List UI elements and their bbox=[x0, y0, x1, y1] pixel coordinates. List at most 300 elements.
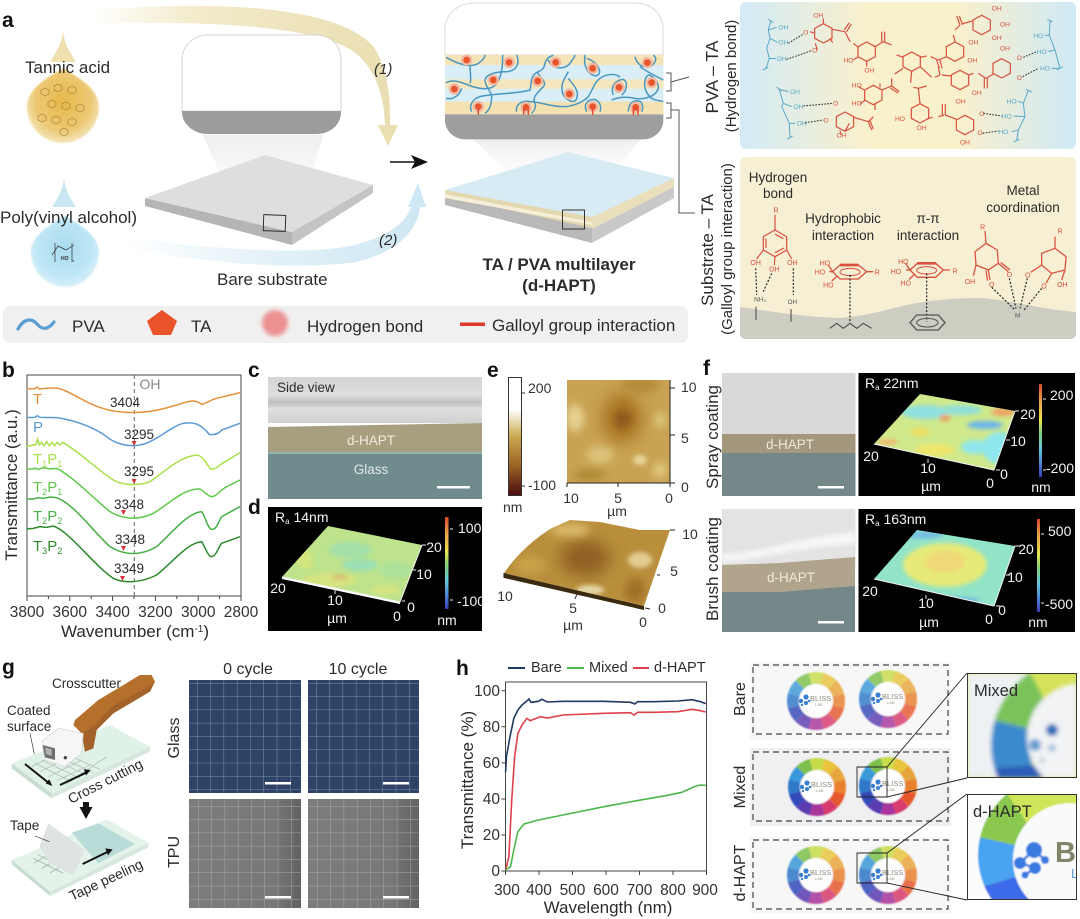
photo: glass 0 cycle bbox=[189, 680, 301, 793]
brush AFM map: µm bbox=[919, 614, 939, 630]
TA molecule: O bbox=[1017, 55, 1022, 62]
photo row: Mixed: LAB bbox=[887, 787, 895, 792]
TA molecule: O bbox=[833, 100, 838, 107]
PVA chains bbox=[446, 55, 663, 113]
schematic: cross cutting: Crosscutter bbox=[52, 676, 122, 691]
zoom box: TA/PVA multilayer cross-section bbox=[445, 3, 663, 175]
TA molecule: O bbox=[812, 48, 817, 55]
zoom callout lines bbox=[857, 673, 967, 900]
brush AFM map: 0 bbox=[998, 602, 1006, 618]
AFM 3D surface: 10 bbox=[497, 588, 513, 604]
side label: PVA – TA (Hydrogen bond): (Hydrogen bond) bbox=[723, 20, 740, 132]
hydrophobic interaction: HO bbox=[815, 270, 826, 277]
d-HAPT coated plate bbox=[445, 152, 674, 243]
curve labels: P bbox=[33, 419, 43, 436]
PVA chains and hydrogen bonds: HO bbox=[1037, 49, 1047, 56]
PVA chains and hydrogen bonds: HO bbox=[998, 129, 1008, 136]
panel e: AFM topography bbox=[487, 359, 698, 633]
curve labels: P bbox=[47, 538, 57, 555]
x tick labels bbox=[10, 604, 259, 621]
AFM 3D surface: 5 bbox=[670, 563, 678, 579]
panel label c: c bbox=[248, 359, 260, 382]
PVA chains and hydrogen bonds: OH bbox=[777, 56, 787, 63]
TA molecule: OH bbox=[813, 12, 824, 19]
photo row: Mixed: BLISS bbox=[882, 779, 903, 788]
AFM 2D map: 10 bbox=[563, 490, 579, 506]
pi-pi interaction: HO bbox=[891, 269, 902, 276]
pi-pi interaction bbox=[891, 211, 959, 330]
TA molecule: HO bbox=[895, 116, 905, 123]
TA molecule: OH bbox=[1000, 46, 1010, 53]
x axis title: -1 bbox=[194, 624, 204, 635]
panel d: 3D roughness map bbox=[248, 496, 485, 631]
AFM 2D map bbox=[563, 377, 697, 519]
x tick labels: 500 bbox=[560, 882, 586, 899]
hydrogen bond mechanism: OH bbox=[788, 299, 798, 306]
icon: PVA drop: HO bbox=[61, 256, 69, 262]
panel: PVA-TA hydrogen bonding chemistry bbox=[740, 2, 1076, 149]
spray AFM map: 22nm bbox=[880, 375, 918, 391]
AFM map d: 0 bbox=[407, 599, 415, 615]
TA molecule: O bbox=[1017, 75, 1022, 82]
spray AFM map: 0 bbox=[986, 475, 994, 491]
AFM map d: 20 bbox=[426, 539, 442, 555]
label: Tannic acid: Tannic acid bbox=[25, 58, 110, 77]
panel label a: a bbox=[2, 9, 14, 32]
TA molecule: O bbox=[803, 30, 808, 37]
curve labels bbox=[33, 391, 62, 556]
x tick labels: 600 bbox=[593, 882, 619, 899]
SEM image: Side view bbox=[277, 380, 335, 395]
inset: d-HAPT zoom: L bbox=[1071, 866, 1078, 881]
photo row: Bare: Bare bbox=[732, 682, 749, 716]
y tick labels: 20 bbox=[483, 827, 500, 844]
photo row: Bare: LAB bbox=[815, 702, 823, 707]
side label: PVA – TA (Hydrogen bond) bbox=[702, 20, 740, 132]
peak values: OH bbox=[140, 376, 160, 392]
AFM map d: 20 bbox=[270, 580, 286, 596]
spray AFM map: 10 bbox=[1010, 433, 1026, 449]
spray AFM map: µm bbox=[921, 478, 941, 494]
pi-pi interaction: π-π bbox=[916, 211, 940, 226]
spray AFM map bbox=[858, 373, 1075, 496]
TA molecule: OH bbox=[972, 90, 982, 97]
brush AFM map: 10 bbox=[1007, 569, 1023, 585]
PVA chains and hydrogen bonds: HO bbox=[1007, 98, 1017, 105]
y tick labels: 80 bbox=[483, 719, 500, 736]
AFM 2D map: 5 bbox=[614, 490, 622, 506]
colour scale: nm bbox=[503, 499, 522, 515]
y tick labels bbox=[474, 683, 500, 880]
spectral curves bbox=[27, 387, 240, 582]
AFM 2D map: 0 bbox=[665, 490, 673, 506]
legend: spectra: Mixed bbox=[589, 660, 628, 676]
hydrogen bond mechanism: bond bbox=[763, 186, 793, 201]
spray AFM map: 200 bbox=[1050, 387, 1074, 403]
brush AFM map: 500 bbox=[1048, 523, 1072, 539]
brush SEM image bbox=[722, 509, 856, 632]
icon: PVA drop: n bbox=[72, 258, 74, 263]
arrow: process direction bbox=[390, 155, 428, 169]
side label: PVA – TA (Hydrogen bond): PVA – TA bbox=[702, 40, 722, 113]
peak values: 3348 bbox=[115, 532, 145, 547]
metal coordination: OH bbox=[965, 279, 975, 286]
PVA chains and hydrogen bonds: OH bbox=[778, 25, 789, 32]
x tick labels: 3800 bbox=[10, 604, 45, 621]
AFM 3D surface: 10 bbox=[682, 526, 698, 542]
side label: Substrate – TA (Galloyl group interaction): (Galloyl group interaction) bbox=[719, 163, 736, 335]
panel label b: b bbox=[2, 359, 15, 382]
peak values: 3404 bbox=[110, 395, 141, 410]
spray AFM map: 10 bbox=[920, 460, 936, 476]
curve labels: T bbox=[33, 391, 42, 408]
AFM map d: nm bbox=[437, 612, 457, 628]
hydrogen bond mechanism: OH bbox=[750, 260, 761, 267]
TA molecule: OH bbox=[1000, 22, 1010, 29]
spray AFM map: -200 bbox=[1046, 460, 1074, 476]
curve labels: 2 bbox=[42, 516, 47, 526]
side label: Brush coating: Brush coating bbox=[703, 517, 722, 621]
panel a: coating schematic bbox=[0, 2, 1076, 343]
panel label f: f bbox=[703, 357, 711, 380]
spray AFM map: a bbox=[875, 383, 880, 392]
tick marks bbox=[27, 596, 241, 601]
column heading: 10 cycle: 10 cycle bbox=[329, 661, 387, 678]
schematic: cross cutting: surface bbox=[7, 719, 51, 734]
brush AFM map: -500 bbox=[1045, 596, 1073, 612]
x axis title: Wavelength (nm) bbox=[544, 898, 672, 917]
hydrogen bond mechanism: Hydrogen bbox=[749, 170, 807, 185]
SEM image bbox=[268, 377, 482, 499]
curve labels: 2 bbox=[42, 487, 47, 497]
TA molecule bbox=[803, 6, 1022, 146]
AFM 2D map: 5 bbox=[681, 430, 689, 446]
photo row: d-HAPT: LAB bbox=[815, 876, 823, 881]
AFM 2D map: 0 bbox=[681, 479, 689, 495]
icon: tannic acid drop bbox=[27, 30, 99, 143]
panel label d: d bbox=[248, 496, 261, 519]
panel: substrate-TA interactions bbox=[740, 157, 1076, 339]
TA molecule: O bbox=[977, 130, 983, 137]
x tick labels: 300 bbox=[494, 882, 520, 899]
brush SEM image: d-HAPT bbox=[767, 570, 815, 585]
AFM map d: a bbox=[285, 517, 290, 526]
hydrophobic interaction: R bbox=[875, 270, 880, 277]
brush AFM map: 10 bbox=[918, 595, 934, 611]
spray SEM image bbox=[722, 373, 856, 496]
AFM map d: R bbox=[275, 509, 285, 525]
TA molecule: O bbox=[823, 117, 829, 124]
label (1): (1) bbox=[374, 61, 392, 78]
label: Bare substrate: Bare substrate bbox=[217, 270, 328, 289]
bracket connectors bbox=[666, 73, 695, 213]
icon: PVA drop bbox=[31, 177, 99, 287]
schematic: cross cutting bbox=[7, 675, 155, 807]
pi-pi interaction: interaction bbox=[897, 228, 959, 243]
label (2): (2) bbox=[379, 232, 397, 249]
title: TA / PVA multilayer (d-HAPT): (d-HAPT) bbox=[522, 276, 596, 295]
OH reference line bbox=[133, 375, 135, 596]
PVA chains and hydrogen bonds: OH bbox=[793, 104, 804, 111]
colour scale bbox=[503, 378, 556, 515]
metal coordination: O bbox=[1007, 272, 1013, 279]
metal coordination: M bbox=[1015, 313, 1020, 320]
y tick labels: 40 bbox=[483, 791, 500, 808]
curve labels: T bbox=[33, 479, 42, 496]
row label: Glass: Glass bbox=[166, 718, 183, 758]
AFM 3D surface: µm bbox=[563, 617, 583, 633]
metal coordination: R bbox=[1057, 228, 1063, 235]
panel label h: h bbox=[456, 657, 469, 680]
photo row: Mixed: BLISS bbox=[811, 780, 832, 789]
brush AFM map: a bbox=[875, 519, 880, 528]
AFM map d: µm bbox=[327, 610, 347, 626]
hydrophobic interaction: interaction bbox=[812, 228, 874, 243]
x tick labels: 800 bbox=[660, 882, 686, 899]
hydrophobic interaction: HO bbox=[823, 282, 834, 289]
arrow (2): PVA to surface bbox=[125, 183, 426, 266]
AFM 3D surface bbox=[497, 520, 698, 633]
panel f: coating comparison bbox=[703, 357, 1075, 632]
photo row: d-HAPT: BLISS bbox=[882, 868, 903, 877]
y axis title: Transmittance (%) bbox=[458, 711, 477, 849]
pi-pi interaction: R bbox=[952, 268, 958, 275]
metal coordination: coordination bbox=[986, 200, 1060, 215]
panel b: FTIR spectra bbox=[2, 359, 259, 641]
TA molecule: OH bbox=[992, 6, 1002, 13]
x tick labels: 3200 bbox=[138, 604, 173, 621]
spectra plot bbox=[27, 375, 241, 601]
AFM map d: 10 bbox=[416, 566, 432, 582]
legend: TA: TA bbox=[191, 317, 212, 336]
side label: Substrate – TA (Galloyl group interaction) bbox=[698, 163, 736, 335]
panel h: transmittance chart and visual comparison bbox=[456, 657, 1080, 917]
TA molecule: OH bbox=[968, 39, 979, 46]
curve labels: P bbox=[47, 508, 57, 525]
colour scale: -100 bbox=[528, 477, 556, 493]
legend: Hydrogen bond: Hydrogen bond bbox=[307, 317, 423, 336]
legend: TA bbox=[147, 310, 212, 336]
legend: spectra bbox=[508, 660, 706, 676]
AFM map d: -100 bbox=[457, 593, 485, 609]
TA molecule: OH bbox=[917, 125, 927, 132]
AFM 2D map: µm bbox=[607, 503, 627, 519]
legend bar bbox=[3, 306, 688, 343]
spray AFM map: nm bbox=[1031, 479, 1051, 495]
curve labels: P bbox=[47, 479, 57, 496]
photo: TPU 10 cycle bbox=[308, 799, 419, 908]
brush AFM map: 20 bbox=[1018, 541, 1034, 557]
photo row: d-HAPT bbox=[732, 837, 951, 913]
curve labels: T bbox=[33, 508, 42, 525]
y tick labels: 60 bbox=[483, 755, 500, 772]
brush AFM map bbox=[858, 509, 1075, 632]
curve labels: 2 bbox=[57, 516, 62, 526]
label: Poly(vinyl alcohol): Poly(vinyl alcohol) bbox=[0, 208, 137, 227]
spray AFM map: 20 bbox=[1020, 406, 1036, 422]
pi-pi interaction: HO bbox=[900, 281, 911, 288]
PVA chains and hydrogen bonds bbox=[763, 19, 1063, 142]
PVA chains and hydrogen bonds: HO bbox=[1002, 113, 1012, 120]
metal coordination: OH bbox=[1057, 282, 1068, 289]
peak values: 3348 bbox=[114, 497, 144, 512]
TA molecule: OH bbox=[960, 139, 970, 146]
PVA chains and hydrogen bonds: OH bbox=[790, 89, 800, 96]
photo: glass 10 cycle bbox=[308, 680, 419, 793]
legend: PVA bbox=[18, 317, 105, 336]
inset: Mixed zoom bbox=[967, 673, 1077, 778]
panel g: cross-cut tape test bbox=[2, 656, 419, 908]
x axis title: Wavenumber (cm bbox=[61, 622, 194, 641]
hydrophobic interaction: HO bbox=[820, 261, 831, 268]
hydrogen bond mechanism: OH bbox=[769, 267, 780, 274]
spray AFM map: 20 bbox=[863, 448, 879, 464]
peak values bbox=[110, 376, 160, 576]
brush AFM map: nm bbox=[1028, 614, 1048, 630]
panel label e: e bbox=[487, 359, 499, 382]
inset: d-HAPT zoom bbox=[967, 794, 1080, 900]
metal coordination: O bbox=[1041, 283, 1047, 290]
PVA chains and hydrogen bonds: HO bbox=[1033, 33, 1043, 40]
SEM image: Glass bbox=[354, 462, 389, 477]
side label: Substrate – TA (Galloyl group interaction): Substrate – TA bbox=[698, 193, 717, 306]
spray AFM map: R bbox=[865, 375, 875, 391]
x tick labels: 700 bbox=[627, 882, 653, 899]
brush AFM map: 163nm bbox=[880, 511, 926, 527]
curve labels: 1 bbox=[57, 459, 62, 469]
photo row: Mixed bbox=[732, 748, 951, 826]
TA molecule: HO bbox=[852, 101, 862, 108]
x tick labels: 900 bbox=[692, 882, 718, 899]
panel label g: g bbox=[2, 656, 15, 679]
hydrogen bond mechanism: OH bbox=[787, 260, 798, 267]
pi-pi interaction: HO bbox=[898, 259, 909, 266]
schematic: cross cutting: Cross cutting bbox=[65, 755, 145, 807]
peak markers bbox=[120, 441, 137, 581]
photo row: Mixed: LAB bbox=[816, 788, 824, 793]
photo row: d-HAPT: d-HAPT bbox=[732, 844, 749, 901]
brush AFM map: 0 bbox=[985, 611, 993, 627]
metal coordination: R bbox=[980, 225, 985, 232]
AFM map d: 100 bbox=[458, 520, 482, 536]
x tick labels: 3400 bbox=[95, 604, 130, 621]
PVA chains and hydrogen bonds: OH bbox=[797, 121, 807, 128]
spray AFM map: 0 bbox=[1000, 466, 1008, 482]
AFM map d: 0 bbox=[393, 608, 401, 624]
x tick labels: 3000 bbox=[181, 604, 216, 621]
schematic: tape peeling: Tape bbox=[10, 818, 39, 833]
y tick labels: 0 bbox=[491, 863, 500, 880]
x tick labels bbox=[494, 882, 718, 899]
schematic: cross cutting: Coated bbox=[7, 703, 51, 718]
AFM 3D surface: 0 bbox=[658, 600, 666, 616]
curve labels: T bbox=[33, 451, 42, 468]
metal coordination bbox=[965, 183, 1068, 320]
inset: d-HAPT zoom: d-HAPT bbox=[973, 803, 1032, 821]
panel c: side-view SEM bbox=[248, 359, 482, 499]
side label: Spray coating: Spray coating bbox=[703, 385, 722, 489]
legend: Hydrogen bond bbox=[262, 310, 423, 336]
photo row: d-HAPT: BLISS bbox=[810, 868, 831, 877]
x tick labels: 3600 bbox=[53, 604, 87, 621]
legend: PVA: PVA bbox=[72, 317, 105, 336]
legend: Galloyl group interaction: Galloyl group interaction bbox=[492, 316, 675, 335]
AFM 3D surface: 5 bbox=[569, 600, 577, 616]
peak values: 3349 bbox=[114, 561, 144, 576]
photo row: d-HAPT: LAB bbox=[887, 876, 895, 881]
brush AFM map: R bbox=[865, 511, 875, 527]
AFM 3D surface: 0 bbox=[639, 614, 647, 630]
metal coordination: O bbox=[989, 282, 995, 289]
zoom box: bare substrate bbox=[182, 35, 341, 200]
y axis title: Transmittance (a.u.) bbox=[2, 409, 21, 561]
photo row: Bare: BLISS bbox=[882, 692, 903, 701]
arrow (1): tannic acid to surface bbox=[90, 6, 398, 146]
x tick labels: 2800 bbox=[224, 604, 259, 621]
TA hydrogen bonding sites bbox=[449, 54, 657, 113]
schematic: tape peeling bbox=[10, 818, 148, 904]
legend: spectra: Bare bbox=[531, 660, 562, 676]
photo row: Bare bbox=[732, 662, 951, 740]
peak values: 3295 bbox=[124, 464, 154, 479]
bare substrate plate bbox=[145, 155, 373, 245]
schematic: tape peeling: Tape peeling bbox=[67, 856, 145, 904]
AFM map d: 10 bbox=[327, 592, 343, 608]
TA molecule: OH bbox=[837, 133, 847, 140]
TA molecule: OH bbox=[967, 57, 978, 64]
PVA chains and hydrogen bonds: OH bbox=[778, 40, 789, 47]
metal coordination: O bbox=[1025, 272, 1031, 279]
TA molecule: HO bbox=[852, 82, 862, 89]
TA molecule: OH bbox=[864, 67, 875, 74]
TA molecule: HO bbox=[843, 57, 853, 64]
row label: TPU: TPU bbox=[166, 836, 183, 868]
TA molecule: OH bbox=[956, 98, 966, 105]
SEM image: d-HAPT bbox=[347, 433, 395, 448]
curve labels: 2 bbox=[57, 546, 62, 556]
hydrophobic interaction: Hydrophobic bbox=[805, 211, 881, 226]
curve labels: P bbox=[47, 451, 57, 468]
title: TA / PVA multilayer (d-HAPT): TA / PVA multilayer bbox=[482, 255, 636, 274]
curve labels: 3 bbox=[42, 546, 47, 556]
brush AFM map: 20 bbox=[862, 583, 878, 599]
photo row: Mixed: Mixed bbox=[732, 766, 749, 808]
x axis title: ) bbox=[203, 622, 209, 641]
peak values: 3295 bbox=[124, 427, 154, 442]
TA molecule: O bbox=[979, 111, 984, 118]
line chart: transmittance bbox=[502, 682, 706, 875]
hydrogen bond mechanism bbox=[749, 170, 807, 322]
photo row: Bare: BLISS bbox=[810, 694, 831, 703]
photo: TPU 0 cycle bbox=[189, 799, 301, 908]
legend: spectra: d-HAPT bbox=[654, 660, 706, 676]
column heading: 0 cycle: 0 cycle bbox=[223, 661, 273, 678]
AFM 2D map: 10 bbox=[681, 379, 697, 395]
curve labels: T bbox=[33, 538, 42, 555]
colour scale: 200 bbox=[528, 380, 552, 396]
AFM map d: 14nm bbox=[290, 509, 328, 525]
metal coordination: Metal bbox=[1006, 183, 1040, 198]
hydrogen bond mechanism: R bbox=[773, 207, 779, 214]
hydrogen bond mechanism: NH₃ bbox=[754, 297, 766, 304]
y tick labels: 100 bbox=[474, 683, 500, 700]
title: TA / PVA multilayer (d-HAPT) bbox=[482, 255, 636, 295]
curve labels: 1 bbox=[57, 487, 62, 497]
photo row: Bare: LAB bbox=[887, 700, 895, 705]
arrow: next step bbox=[80, 802, 92, 819]
x tick labels: 400 bbox=[526, 882, 552, 899]
hydrophobic interaction bbox=[805, 211, 881, 328]
